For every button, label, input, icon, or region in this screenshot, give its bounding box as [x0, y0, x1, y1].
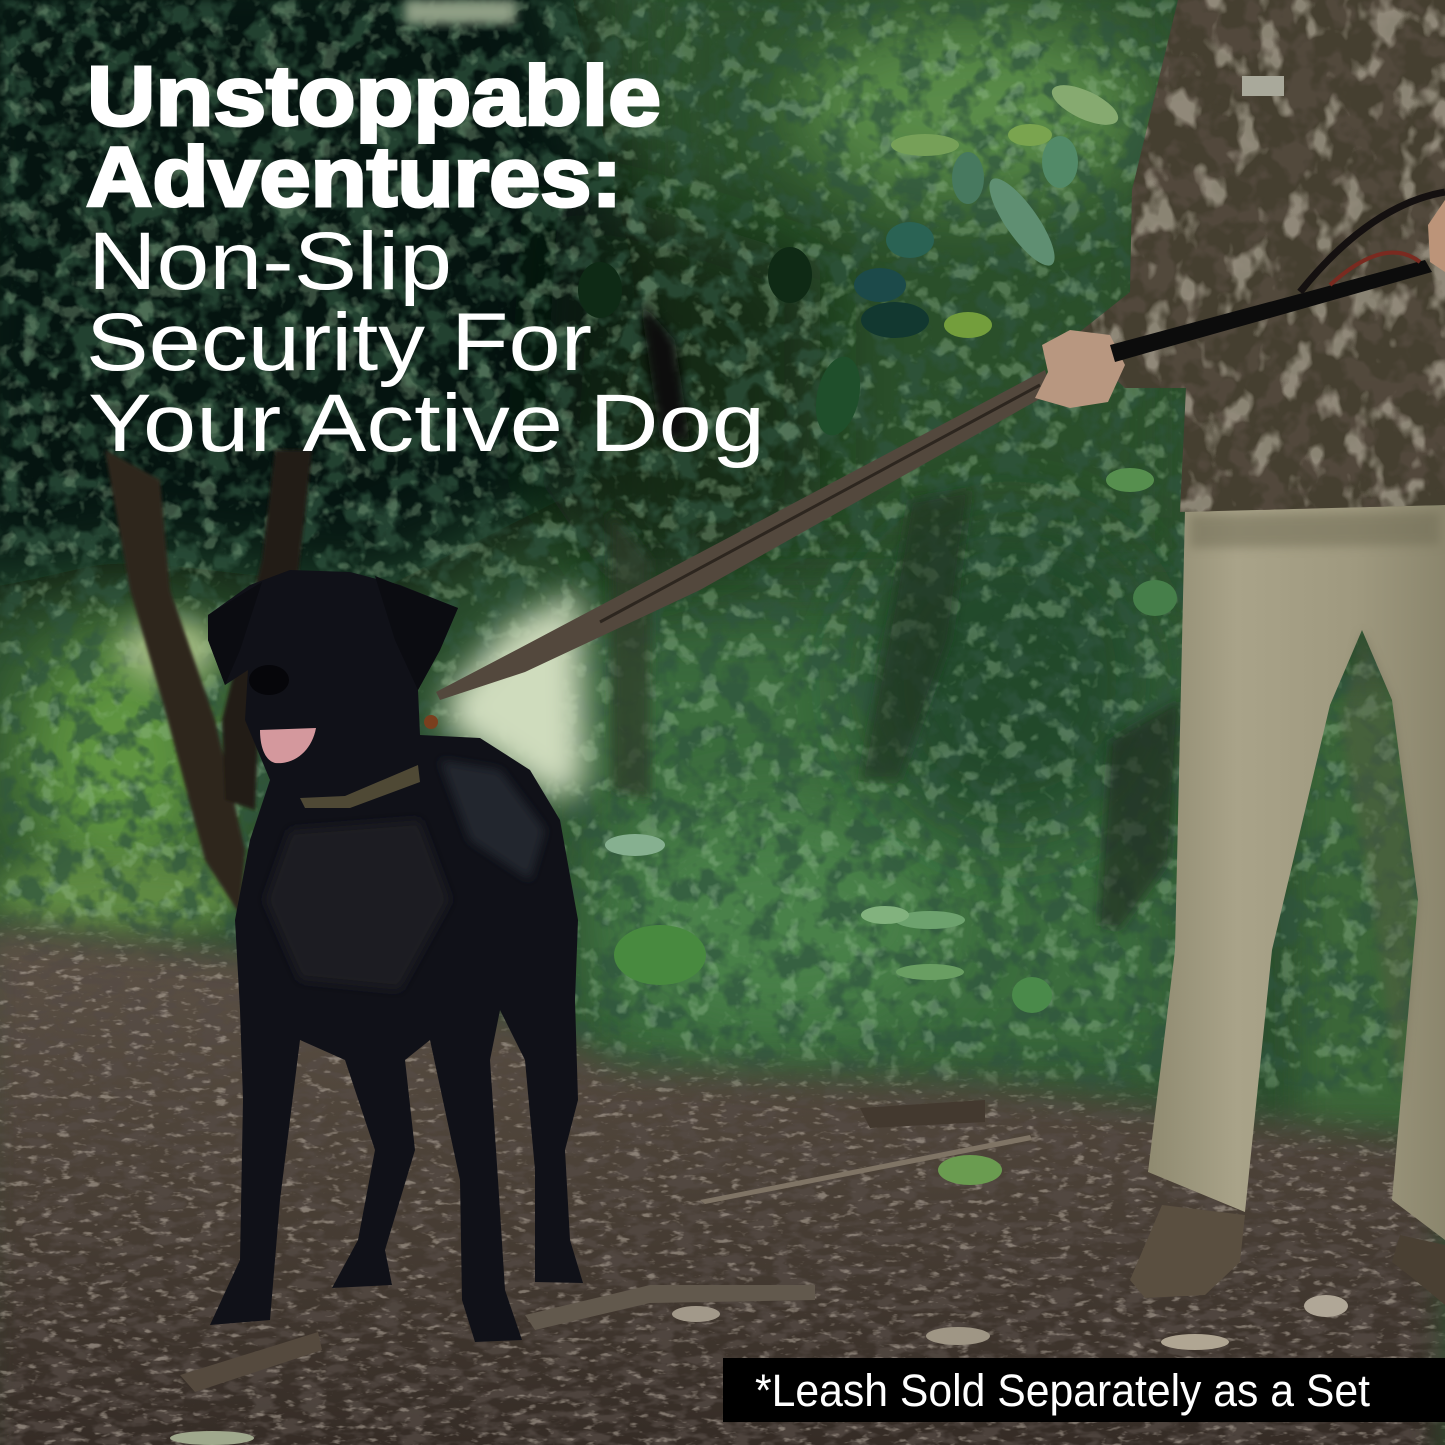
bright woodland gap: [445, 590, 585, 800]
large leaves: [578, 77, 1177, 1013]
dog tongue: [260, 728, 316, 763]
collar tag: [424, 715, 438, 729]
hand on leash: [1035, 330, 1125, 408]
heading bold: Unstoppable: [87, 49, 661, 143]
left meadow glow: [20, 630, 220, 890]
right boot: [1392, 1235, 1445, 1305]
note banner: *Leash Sold Separately as a Set: [755, 1365, 1370, 1416]
far right bushes: [1300, 690, 1440, 1130]
dog: [208, 570, 583, 1342]
heading bold: [86, 49, 661, 224]
dark band right of headline: [540, 180, 820, 600]
background trunks: [610, 300, 1180, 930]
trouser shadows: [1340, 630, 1418, 1100]
sticks and debris: [170, 1100, 1348, 1445]
right bushes: [590, 620, 1180, 1070]
heading light: Security For: [86, 297, 592, 388]
mid canopy: [640, 0, 1180, 560]
dark canopy behind headline: [0, 0, 640, 600]
person: [1035, 0, 1445, 1305]
dog nose: [249, 665, 289, 695]
dog body silhouette: [208, 570, 583, 1342]
foliage textures: [0, 0, 1445, 1100]
heading light: Your Active Dog: [88, 378, 765, 469]
heading light: Non-Slip: [88, 216, 452, 307]
lower left ground-cover: [0, 855, 250, 935]
forest floor: [0, 900, 1445, 1445]
heading light: [86, 216, 765, 469]
dog collar: [300, 765, 420, 808]
leash: [436, 370, 1052, 700]
dog ears: [208, 582, 262, 685]
meadow highlight: [120, 618, 220, 682]
trousers: [1148, 505, 1445, 1240]
jacket label: [1242, 76, 1284, 96]
leash handle: [1110, 260, 1432, 362]
other hand: [1428, 200, 1445, 272]
bright upper foliage: [790, 20, 1150, 200]
title: [86, 49, 765, 469]
dog coat sheen: [440, 760, 545, 880]
camo jacket: [1060, 0, 1445, 520]
heading bold: Adventures:: [86, 130, 622, 224]
pale sky patch at top: [405, 0, 515, 24]
left boot: [1130, 1205, 1245, 1298]
tree trunks: [105, 450, 312, 915]
